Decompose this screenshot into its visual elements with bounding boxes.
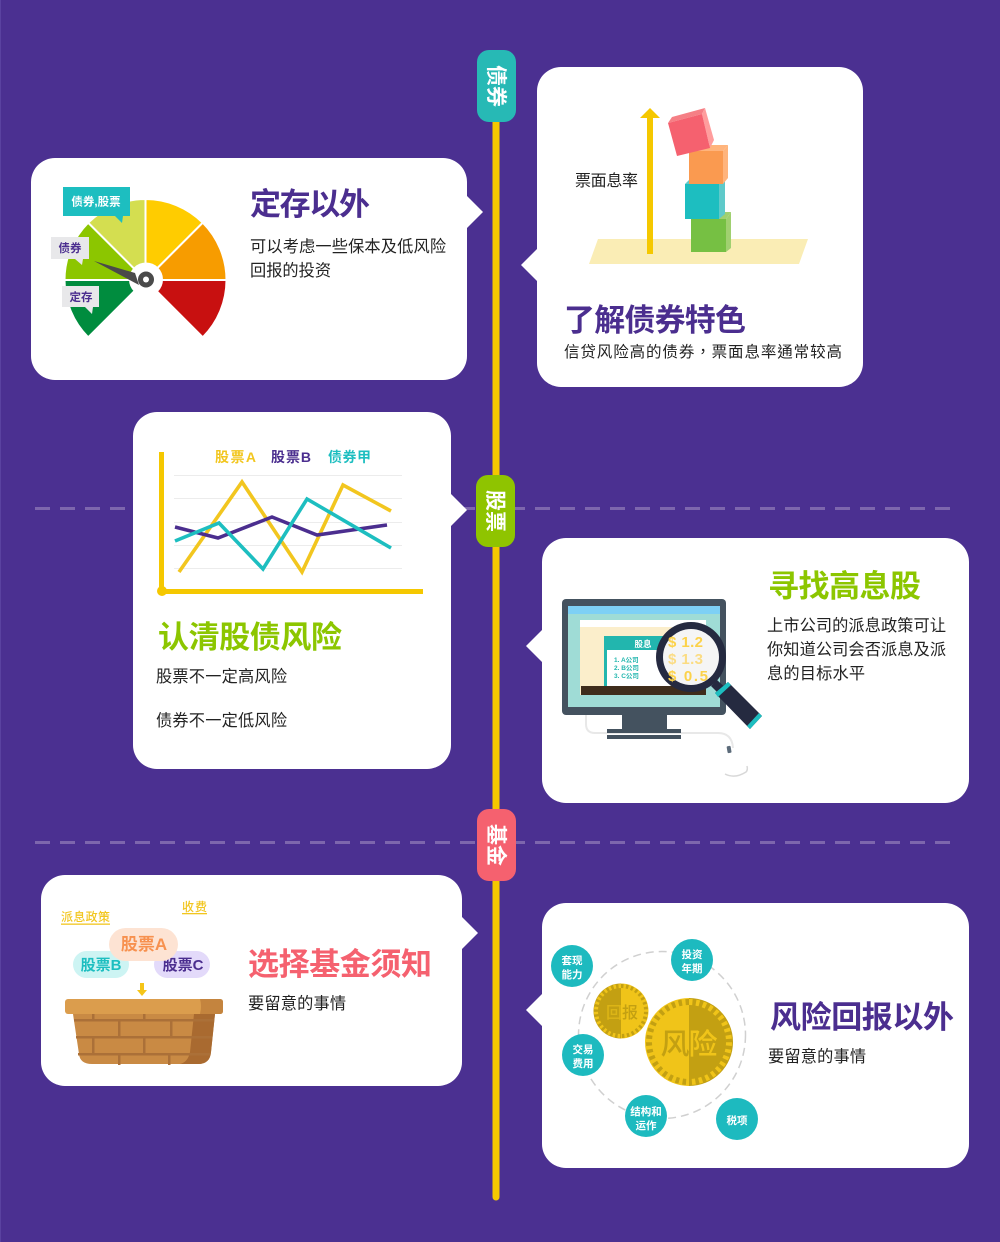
bubble: 结构和运作: 运作 — [636, 1119, 657, 1132]
chart legend — [215, 449, 371, 465]
panel: 认清股债风险 — [133, 412, 467, 769]
panel: 选择基金须知 — [41, 875, 478, 1086]
risk and return diagram — [551, 939, 758, 1140]
panel: 风险回报以外 — [526, 903, 969, 1168]
text block — [156, 668, 287, 730]
gauge label: 债券: 债券 — [58, 241, 82, 255]
magnifier: $ 1.2 — [668, 634, 703, 651]
basket illustration: 派息政策 — [61, 909, 110, 924]
coin: 回报: 回 — [606, 1005, 622, 1022]
heading: 认清股债风险 — [158, 620, 342, 655]
gauge label: 债券 — [51, 237, 89, 265]
text block: 息的目标水平 — [767, 665, 865, 683]
bubble: 交易费用: 交易 — [572, 1043, 594, 1056]
chart legend: 债券甲 — [328, 449, 371, 465]
gauge label: 债券,股票: 债券,股票 — [71, 194, 121, 208]
heading: 风险回报以外 — [770, 1000, 954, 1035]
monitor illustration — [562, 599, 762, 776]
stacked blocks illustration — [589, 108, 808, 264]
heading: 了解债券特色 — [564, 303, 746, 338]
basket illustration: 收费 — [182, 899, 207, 914]
chart legend: 股票B — [271, 449, 311, 465]
magnifier: $ 0.5 — [668, 668, 708, 685]
text block — [250, 238, 446, 280]
text block: 要留意的事情 — [768, 1047, 866, 1066]
gauge chart — [64, 199, 227, 337]
tag: 股票 — [476, 475, 515, 547]
text block: 回报的投资 — [250, 262, 331, 280]
gauge label: 定存 — [62, 286, 99, 314]
tag: 股票: 股票 — [483, 490, 506, 532]
bubble: 交易费用: 费用 — [572, 1057, 594, 1070]
bubble: 结构和运作 — [625, 1095, 667, 1137]
text block: 可以考虑一些保本及低风险 — [250, 238, 446, 256]
basket illustration — [61, 899, 223, 1065]
bubble: 投资年期: 年期 — [682, 962, 702, 975]
text block: 你知道公司会否派息及派 — [767, 641, 946, 659]
coin: 风险: 风 — [660, 1029, 690, 1061]
tag: 债券: 债券 — [484, 65, 507, 107]
bubble: 结构和运作: 结构和 — [630, 1105, 662, 1118]
basket illustration: 股票A — [121, 935, 167, 954]
text block — [767, 617, 946, 683]
bubble: 投资年期: 投资 — [682, 948, 703, 961]
monitor illustration: 3. C公司 — [614, 672, 639, 680]
heading: 定存以外 — [250, 187, 370, 222]
text block: 股票不一定高风险 — [156, 668, 287, 686]
monitor illustration: 股息 — [634, 639, 652, 649]
text block: 上市公司的派息政策可让 — [767, 617, 946, 635]
text block: 债券不一定低风险 — [156, 712, 287, 730]
panel: 了解债券特色 — [521, 67, 863, 387]
monitor illustration: 2. B公司 — [614, 664, 639, 672]
text block: 要留意的事情 — [248, 994, 346, 1013]
tag: 基金 — [477, 809, 516, 881]
bubble: 套现能力 — [551, 945, 593, 987]
chart legend: 股票A — [215, 449, 256, 465]
bubble: 套现能力: 能力 — [562, 968, 582, 981]
gauge label: 定存: 定存 — [70, 290, 93, 304]
bubble: 投资年期 — [671, 939, 713, 981]
bubble: 税项 — [716, 1098, 758, 1140]
gauge label: 债券,股票 — [63, 187, 130, 223]
bubble: 交易费用 — [562, 1034, 604, 1076]
coin: 回报: 报 — [622, 1004, 638, 1022]
basket illustration: 股票B — [81, 957, 122, 974]
heading: 选择基金须知 — [248, 947, 432, 982]
magnifier: $ 1.3 — [668, 651, 703, 668]
coin: 风险 — [645, 998, 733, 1086]
basket illustration: 股票C — [163, 957, 204, 974]
axis label: 票面息率 — [575, 172, 638, 190]
monitor illustration: 1. A公司 — [614, 656, 639, 664]
bubble: 套现能力: 套现 — [562, 954, 583, 967]
panel: 寻找高息股 — [526, 538, 969, 803]
coin: 回报 — [594, 983, 648, 1038]
timeline axis — [492, 90, 500, 1197]
coin: 风险: 险 — [688, 1028, 718, 1061]
magnifier — [656, 622, 762, 729]
bubble: 税项: 税项 — [726, 1114, 748, 1127]
text block: 信贷风险高的债券，票面息率通常较高 — [564, 343, 842, 361]
line chart — [157, 452, 423, 596]
heading: 寻找高息股 — [768, 569, 921, 604]
panel: 定存以外 — [31, 158, 483, 380]
tag: 债券 — [477, 50, 516, 122]
tag: 基金: 基金 — [484, 824, 508, 866]
